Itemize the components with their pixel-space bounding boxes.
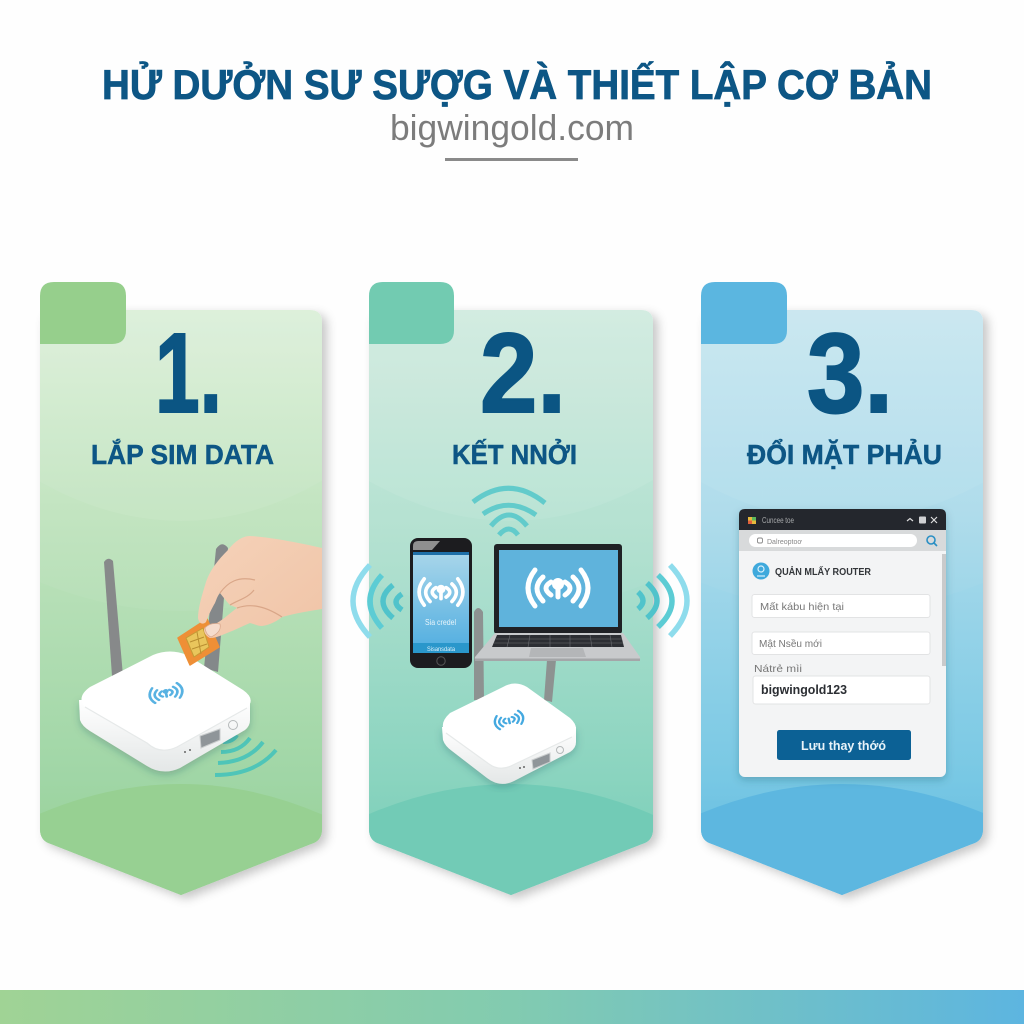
usb port	[532, 753, 550, 769]
admin heading: QUẢN MLẤY ROUTER	[775, 565, 872, 578]
status dots	[519, 767, 521, 769]
window title: Cuncee toe	[762, 516, 794, 525]
number 3: 3.	[807, 310, 893, 436]
window favicon	[748, 517, 756, 524]
router with antennas	[79, 544, 251, 772]
heading 2: KẾT NNỞI	[452, 438, 577, 470]
field: value	[753, 676, 930, 704]
title: HỬ DƯỞN SƯ SƯỢG VÀ THIẾT LẬP CƠ BẢN	[102, 60, 932, 108]
wifi waves right	[638, 565, 687, 636]
field: new password	[752, 632, 930, 654]
phone footer label: Sisansdata	[427, 647, 456, 653]
address icon	[758, 538, 762, 543]
phone label: Sia credel	[425, 618, 456, 627]
heading 1: LẮP SIM DATA	[91, 439, 274, 470]
status dots	[184, 751, 186, 753]
wifi waves left	[353, 565, 402, 637]
wifi waves top	[473, 488, 545, 535]
number 2: 2.	[480, 310, 566, 436]
search icon	[927, 536, 937, 546]
address field	[749, 534, 917, 547]
subtitle: website: bigwingold.com	[390, 107, 634, 148]
field: current password: Mất kábu hiện tại	[760, 601, 844, 613]
smartphone	[410, 538, 472, 668]
tab 2	[369, 282, 454, 344]
number 1: 1.	[155, 310, 222, 436]
address text: Dalreoptoơ	[767, 539, 802, 546]
window controls	[907, 516, 937, 524]
tab 1	[40, 282, 126, 344]
bottom gradient bar	[0, 990, 1024, 1024]
scrollbar	[942, 554, 946, 666]
panel: step 1 insert SIM	[30, 282, 330, 900]
usb port	[200, 729, 220, 748]
field label: Nátrẻ mìi	[754, 663, 802, 675]
title underline	[445, 158, 578, 161]
SIM card	[178, 619, 219, 665]
browser window	[739, 509, 946, 777]
field: value: bigwingold123	[761, 682, 847, 697]
laptop wifi icon	[528, 570, 588, 606]
phone wifi icon	[419, 579, 463, 605]
router with antennas	[442, 608, 576, 784]
field: new password: Mật Nsều mới	[759, 638, 822, 650]
tab 3	[701, 282, 787, 344]
power icon	[556, 746, 564, 754]
router wifi logo	[148, 682, 184, 704]
save button: Lưu thay thớó	[801, 738, 886, 753]
hand	[198, 536, 322, 638]
teal signal arcs	[215, 735, 276, 775]
router admin icon	[752, 562, 770, 580]
panel: step 2 connect	[353, 282, 687, 900]
heading 3: ĐỔI MẶT PHẢU	[747, 438, 942, 470]
field: current password	[752, 594, 930, 618]
router wifi logo	[493, 710, 525, 730]
power icon	[228, 720, 238, 730]
laptop	[475, 544, 640, 661]
panel: step 3 change password	[690, 282, 995, 900]
save button	[777, 730, 911, 760]
